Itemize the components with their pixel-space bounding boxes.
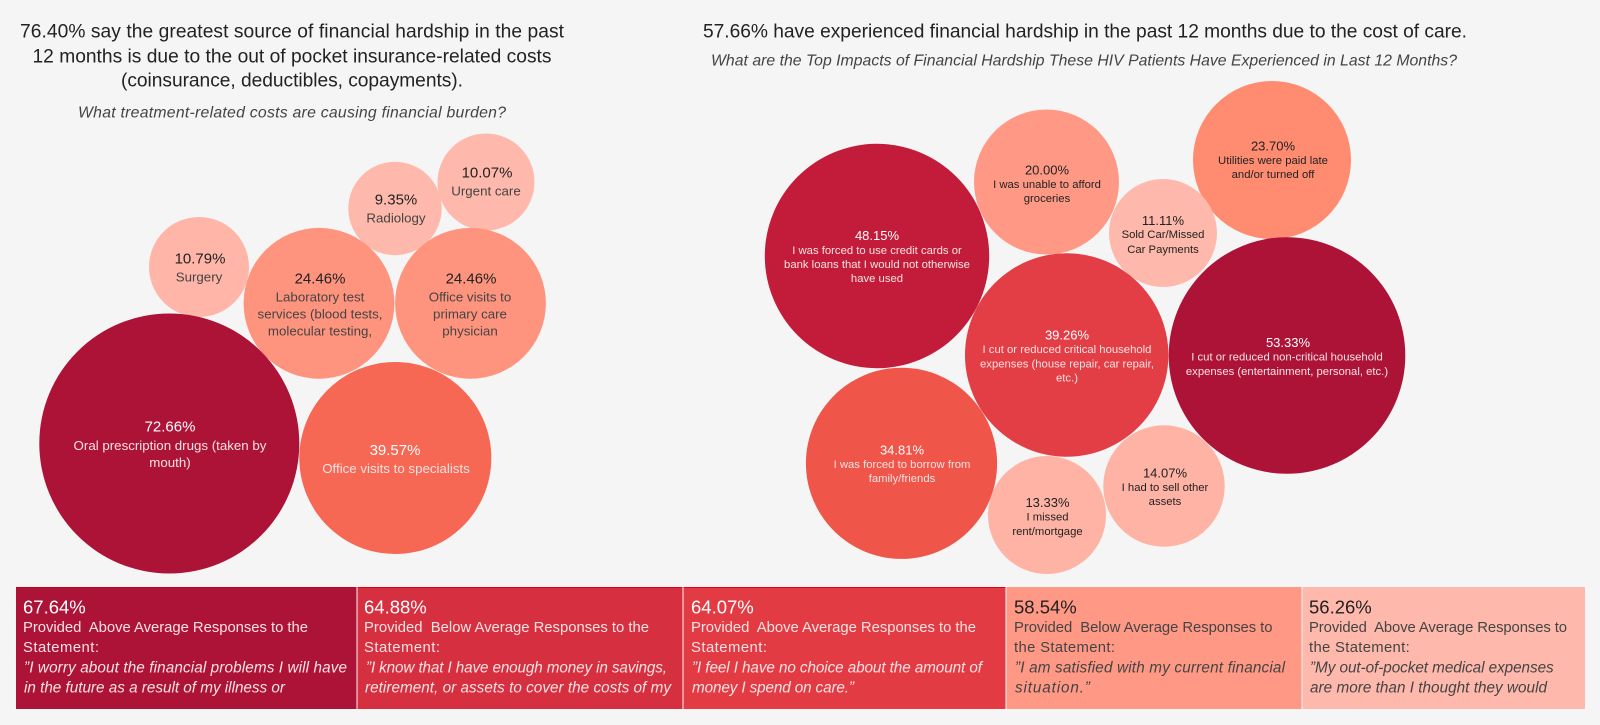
title: right heading: 57.66% have experienced financial hardship in the past 12 months due to the cost of care.	[703, 22, 1467, 42]
card: no choice about money spent on care: Statement:	[691, 640, 767, 656]
bubble: critical household expenses: expenses (house repair, car repair,	[980, 358, 1154, 370]
bubble: urgent care	[438, 134, 534, 230]
card: satisfied with financial situation	[1006, 587, 1302, 709]
card: enough money in savings: Provided Below Average Responses to the	[364, 620, 649, 636]
bubble: laboratory test services: molecular testing,	[268, 324, 372, 338]
bubble: critical household expenses	[965, 253, 1168, 457]
card: no choice about money spent on care: Provided Above Average Responses to the	[691, 620, 976, 636]
bubble: non-critical household expenses: 53.33%	[1266, 335, 1310, 350]
bubble: oral prescription drugs: mouth)	[149, 455, 191, 470]
bubble: utilities paid late: Utilities were paid late	[1218, 155, 1328, 167]
card: worry about financial problems: ”I worry about the financial problems I will have	[24, 660, 347, 676]
bubble: laboratory test services: 24.46%	[295, 270, 345, 288]
panel: statement response cards	[16, 587, 1585, 709]
bubble: critical household expenses: 39.26%	[1045, 328, 1089, 342]
bubble: sell other assets	[1103, 425, 1225, 547]
bubble: credit cards or bank loans: have used	[851, 273, 903, 285]
bubble: sold car: 11.11%	[1142, 213, 1185, 228]
title: left heading	[20, 22, 565, 92]
bubble: sold car: Car Payments	[1127, 244, 1199, 256]
bubble: laboratory test services: Laboratory test	[276, 290, 365, 304]
card: no choice about money spent on care	[684, 587, 1006, 709]
bubble: unable to afford groceries	[974, 110, 1119, 254]
bubble: office visits to primary care physician: primary care	[433, 306, 507, 322]
card: satisfied with financial situation: ”I am satisfied with my current financial	[1015, 660, 1286, 676]
card: satisfied with financial situation: the Statement:	[1014, 640, 1115, 656]
card: satisfied with financial situation: Provided Below Average Responses to	[1014, 620, 1272, 636]
bubble: critical household expenses: etc.)	[1056, 372, 1078, 384]
bubble: office visits to specialists: 39.57%	[370, 442, 420, 459]
card: no choice about money spent on care: money I spend on care.”	[692, 680, 855, 696]
bubble: sold car: Sold Car/Missed	[1122, 229, 1204, 241]
bubble: office visits to specialists: Office visits to specialists	[322, 461, 470, 476]
bubble: unable to afford groceries: I was unable to afford	[993, 179, 1101, 191]
card: enough money in savings: ”I know that I have enough money in savings,	[366, 660, 667, 676]
subtitle: right question: What are the Top Impacts of Financial Hardship These HIV Patients Have Experienced in Last 12 Months?	[711, 52, 1457, 70]
card: no choice about money spent on care: 64.07%	[691, 596, 754, 618]
bubble: office visits to primary care physician: Office visits to	[429, 290, 511, 304]
card: no choice about money spent on care: ”I feel I have no choice about the amount of	[692, 660, 984, 676]
bubble: laboratory test services: services (blood tests,	[258, 306, 382, 322]
bubble: surgery: 10.79%	[175, 250, 225, 268]
bubble: office visits to primary care physician: physician	[442, 324, 498, 338]
card: out-of-pocket expenses more than expected: 56.26%	[1309, 596, 1372, 618]
bubble: non-critical household expenses: expenses (entertainment, personal, etc.)	[1186, 366, 1388, 378]
bubble: missed rent or mortgage: rent/mortgage	[1012, 526, 1083, 538]
card: satisfied with financial situation: situation.”	[1015, 680, 1091, 696]
card: worry about financial problems: Provided Above Average Responses to the	[23, 620, 308, 636]
bubble: borrow from family and friends: family/friends	[869, 473, 936, 485]
bubble: missed rent or mortgage	[988, 456, 1106, 574]
bubble: missed rent or mortgage: I missed	[1026, 512, 1069, 524]
card: worry about financial problems	[16, 587, 356, 709]
bubble: office visits to specialists	[299, 362, 491, 554]
card: out-of-pocket expenses more than expected	[1302, 587, 1585, 709]
bubble: borrow from family and friends: 34.81%	[880, 442, 924, 458]
bubble: utilities paid late: and/or turned off	[1232, 169, 1315, 181]
bubble: sell other assets: 14.07%	[1143, 466, 1187, 480]
bubble: office visits to primary care physician: 24.46%	[446, 270, 496, 288]
bubble: radiology: Radiology	[366, 210, 426, 226]
bubble: sell other assets: I had to sell other	[1122, 482, 1209, 494]
title: left heading: 12 months is due to the out of pocket insurance-related costs	[32, 46, 552, 68]
bubble: urgent care: 10.07%	[462, 164, 512, 182]
bubble: non-critical household expenses	[1169, 237, 1405, 474]
bubble: unable to afford groceries: groceries	[1024, 193, 1071, 205]
bubble: credit cards or bank loans: bank loans that I would not otherwise	[784, 259, 970, 271]
bubble: office visits to primary care physician	[395, 228, 546, 379]
bubble: oral prescription drugs: 72.66%	[145, 418, 195, 436]
bubble: radiology: 9.35%	[375, 192, 417, 208]
card: satisfied with financial situation: 58.54%	[1014, 596, 1077, 618]
bubble: credit cards or bank loans	[765, 144, 989, 368]
subtitle: left question: What treatment-related costs are causing financial burden?	[78, 104, 506, 122]
bubble: critical household expenses: I cut or reduced critical household	[983, 344, 1151, 356]
panel: treatment-related costs	[20, 22, 565, 574]
bubble: laboratory test services	[244, 228, 394, 379]
bubble: surgery: Surgery	[176, 270, 223, 284]
bubble: credit cards or bank loans: I was forced to use credit cards or	[792, 245, 962, 257]
bubble: missed rent or mortgage: 13.33%	[1025, 495, 1070, 510]
card: out-of-pocket expenses more than expected: the Statement:	[1309, 640, 1410, 656]
bubble: oral prescription drugs: Oral prescription drugs (taken by	[74, 438, 267, 453]
bubble: credit cards or bank loans: 48.15%	[855, 228, 899, 243]
bubble: oral prescription drugs	[39, 314, 299, 574]
card: out-of-pocket expenses more than expected: ”My out-of-pocket medical expenses	[1310, 660, 1554, 676]
bubble: unable to afford groceries: 20.00%	[1025, 162, 1069, 178]
bubble: surgery	[149, 217, 249, 317]
title: left heading: 76.40% say the greatest source of financial hardship in the past	[20, 22, 565, 42]
card: enough money in savings	[358, 587, 682, 709]
bubble: utilities paid late	[1193, 81, 1351, 239]
card: worry about financial problems: 67.64%	[23, 596, 86, 618]
panel: impacts of financial hardship	[703, 22, 1467, 574]
bubble: borrow from family and friends: I was forced to borrow from	[834, 459, 970, 471]
bubble: urgent care: Urgent care	[451, 184, 521, 198]
title: left heading: (coinsurance, deductibles, copayments).	[121, 70, 463, 92]
bubble: sold car	[1109, 179, 1217, 287]
card: enough money in savings: 64.88%	[364, 596, 427, 618]
card: worry about financial problems: Statement:	[23, 640, 99, 656]
bubble: radiology	[348, 162, 442, 255]
bubble: non-critical household expenses: I cut or reduced non-critical household	[1191, 352, 1383, 364]
card: out-of-pocket expenses more than expected: Provided Above Average Responses to	[1309, 620, 1567, 636]
bubble: borrow from family and friends	[806, 368, 997, 559]
bubble: sell other assets: assets	[1149, 496, 1182, 508]
bubble: utilities paid late: 23.70%	[1251, 138, 1295, 154]
card: enough money in savings: retirement, or assets to cover the costs of my	[365, 680, 672, 696]
card: worry about financial problems: in the future as a result of my illness or	[24, 680, 286, 696]
card: enough money in savings: Statement:	[364, 640, 440, 656]
card: out-of-pocket expenses more than expected: are more than I thought they would	[1310, 680, 1547, 696]
